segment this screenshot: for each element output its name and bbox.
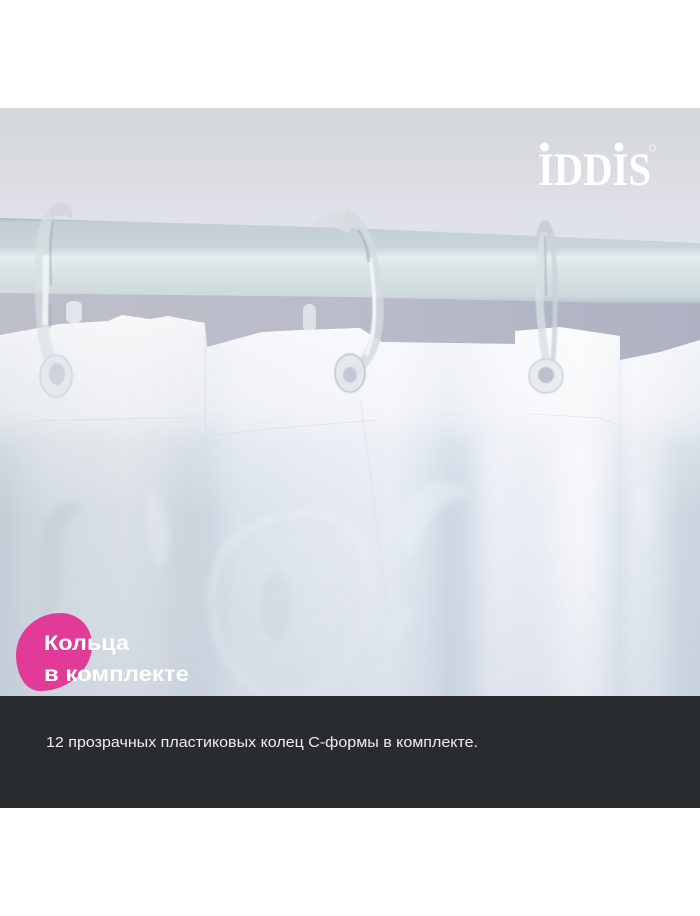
caption: 12 прозрачных пластиковых колец С-формы в комплекте. [46,735,478,751]
photo: curtain on rod [0,108,700,710]
eyelet middle [335,354,365,392]
fold shadow [360,400,366,444]
ring right [529,220,563,393]
eyelet left [40,355,72,397]
fabric folds [672,457,698,686]
heading [44,632,189,686]
dark caption band [0,696,700,808]
top hem glow [0,315,700,482]
infographic canvas [0,108,700,808]
damask pattern [52,483,462,643]
wall [0,108,700,243]
panel edge right [620,336,621,429]
shadowed wall under rod [0,293,700,360]
stitch lines [0,414,617,436]
hooks behind curtain [66,301,316,332]
ring middle [334,210,384,394]
curtain rod [0,218,700,305]
cloth base [0,310,700,700]
heading: в комплекте [44,663,189,686]
bottom tone [237,619,662,696]
logo: IDDIS [538,144,651,196]
curtain fabric [0,310,700,710]
ring left [40,203,72,397]
pink blob [16,613,92,691]
heading: Кольца [44,632,129,655]
panel edge left [204,324,206,428]
eyelet right [529,359,563,393]
